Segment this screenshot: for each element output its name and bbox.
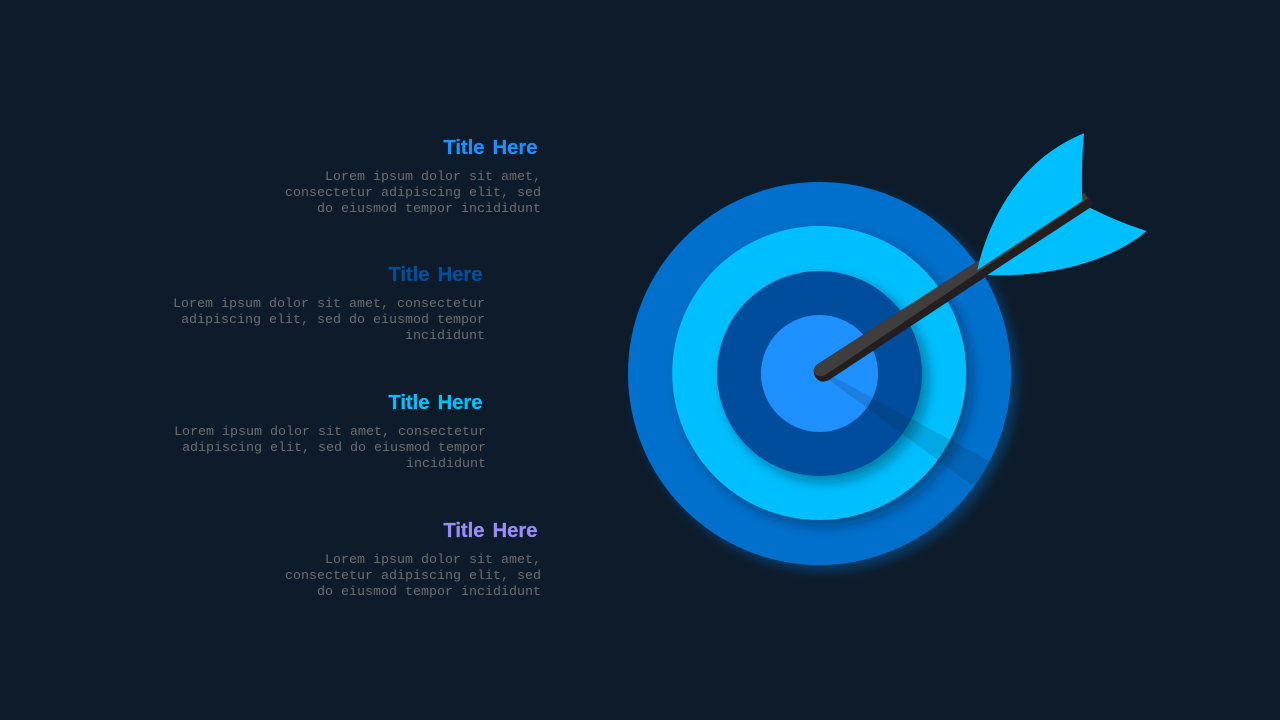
bullseye bbox=[761, 315, 878, 432]
body text 4: Lorem ipsum dolor sit amet, bbox=[325, 553, 541, 568]
body text 3 bbox=[174, 425, 486, 472]
lower feather bbox=[987, 208, 1147, 275]
text block 2 bbox=[173, 264, 485, 344]
heading 4: Title Here bbox=[443, 520, 538, 542]
heading 1: Title Here bbox=[443, 137, 538, 159]
third ring bbox=[717, 271, 922, 476]
second ring bbox=[672, 226, 966, 520]
body text 3: adipiscing elit, sed do eiusmod tempor bbox=[182, 441, 486, 456]
body text 2 bbox=[173, 297, 485, 344]
body text 2: incididunt bbox=[405, 329, 485, 344]
body text 2: Lorem ipsum dolor sit amet, consectetur bbox=[173, 297, 485, 312]
heading 3: Title Here bbox=[388, 392, 482, 414]
body text 4 bbox=[285, 553, 541, 600]
body text 4: consectetur adipiscing elit, sed bbox=[285, 569, 541, 584]
text block 4 bbox=[285, 520, 541, 600]
arrow shadow on target bbox=[829, 377, 990, 486]
body text 3: incididunt bbox=[406, 457, 486, 472]
text block 3 bbox=[174, 392, 486, 472]
body text 1 bbox=[285, 170, 541, 217]
body text 2: adipiscing elit, sed do eiusmod tempor bbox=[181, 313, 485, 328]
arrow shaft bbox=[814, 193, 1093, 382]
body text 1: consectetur adipiscing elit, sed bbox=[285, 186, 541, 201]
body text 1: do eiusmod tempor incididunt bbox=[317, 202, 541, 217]
upper feather bbox=[977, 133, 1084, 270]
target board bbox=[628, 182, 1011, 565]
arrow bbox=[814, 133, 1147, 382]
outer ring bbox=[628, 182, 1011, 565]
body text 3: Lorem ipsum dolor sit amet, consectetur bbox=[174, 425, 486, 440]
body text 1: Lorem ipsum dolor sit amet, bbox=[325, 170, 541, 185]
heading 2: Title Here bbox=[388, 264, 482, 286]
text block 1 bbox=[285, 137, 541, 217]
body text 4: do eiusmod tempor incididunt bbox=[317, 585, 541, 600]
